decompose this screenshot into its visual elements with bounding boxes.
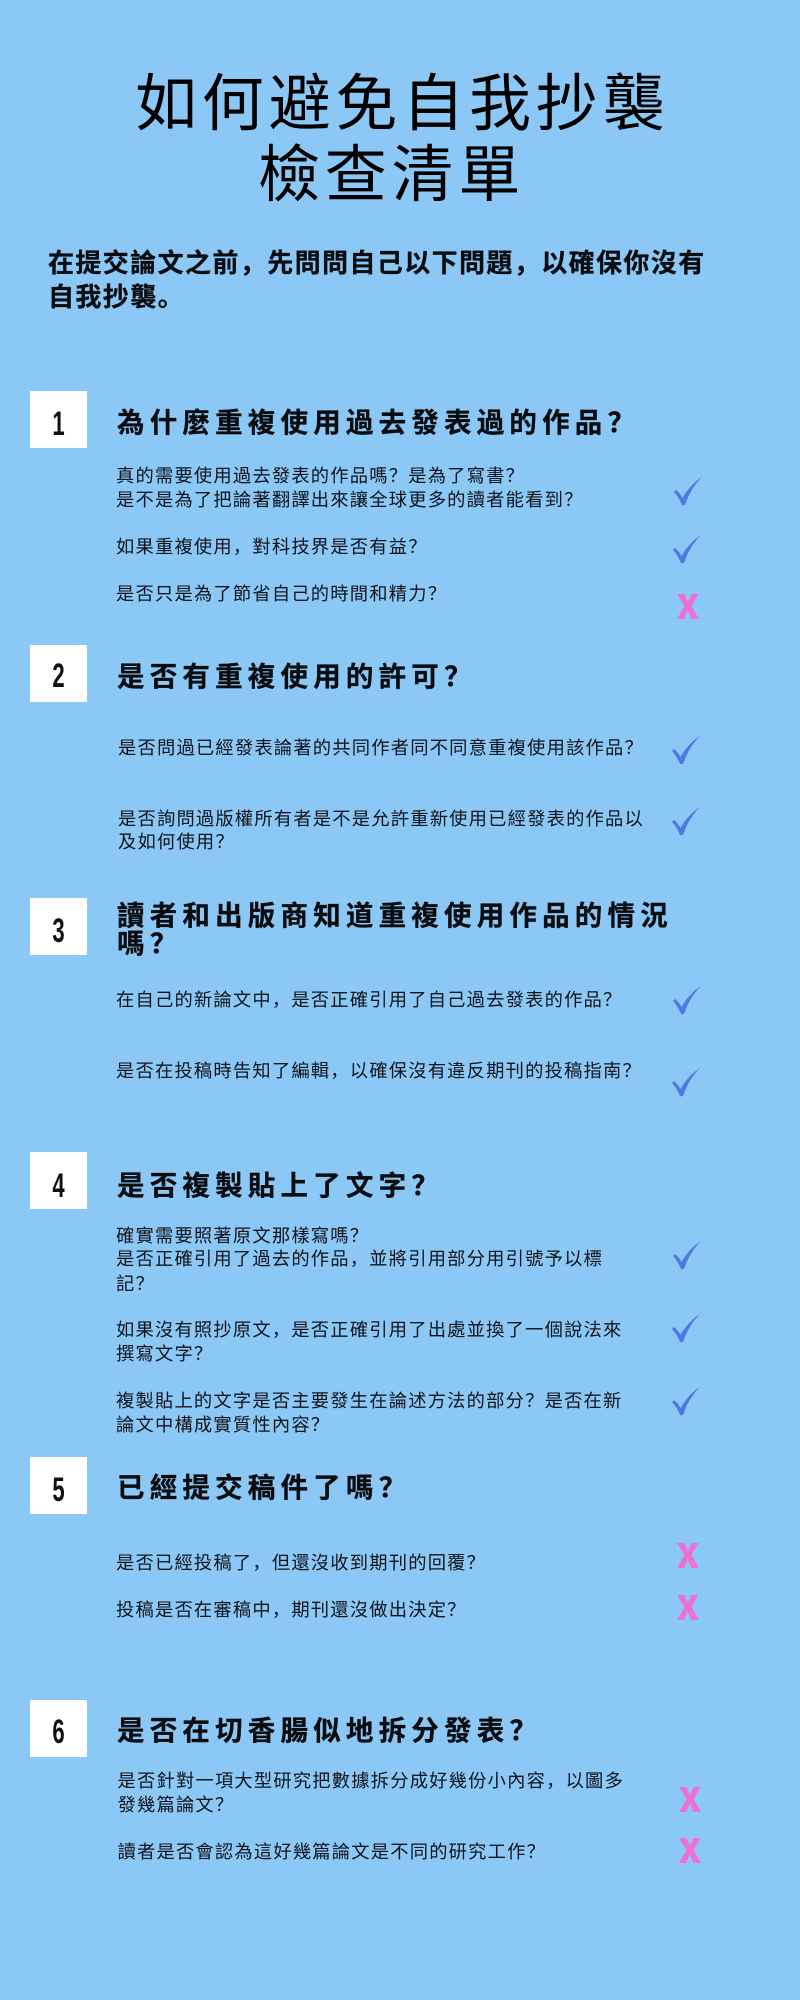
item text 6.2: 讀者是否會認為這好幾篇論文是不同的研究工作？ — [118, 1841, 546, 1862]
item text 4.2: 撰寫文字？ — [116, 1343, 213, 1364]
icon: cross — [679, 1787, 701, 1812]
title: 檢查清單 — [258, 141, 525, 210]
intro text: 在提交論文之前，先問問自己以下問題，以確保你沒有 — [48, 248, 706, 278]
icon: check — [672, 736, 700, 764]
intro text: 自我抄襲。 — [48, 282, 185, 312]
item text 4.3 — [116, 1390, 623, 1435]
title: 如何避免自我抄襲 — [135, 70, 669, 139]
item text 4.1: 是否正確引用了過去的作品，並將引用部分用引號予以標 — [116, 1248, 603, 1269]
panel: section 6 — [30, 1700, 701, 1863]
number badge 1 — [30, 391, 87, 448]
panel: section 5 — [30, 1457, 699, 1620]
icon: check — [673, 535, 701, 563]
number badge 2: 2 — [52, 657, 65, 695]
heading 5: 已經提交稿件了嗎？ — [117, 1472, 411, 1503]
item text 2.2: 及如何使用？ — [118, 831, 235, 852]
item text 4.3: 複製貼上的文字是否主要發生在論述方法的部分？是否在新 — [116, 1390, 623, 1411]
item text 1.1 — [116, 465, 584, 510]
heading 2: 是否有重複使用的許可？ — [117, 661, 477, 692]
item text 6.1: 是否針對一項大型研究把數據拆分成好幾份小內容，以圖多 — [118, 1770, 624, 1791]
icon: check — [672, 1387, 700, 1415]
number badge 3: 3 — [52, 912, 65, 950]
heading 3: 嗎？ — [117, 928, 182, 959]
title — [135, 70, 669, 210]
icon: cross — [679, 1838, 701, 1863]
panel: section 1 — [30, 391, 702, 619]
item text 1.3: 是否只是為了節省自己的時間和精力？ — [116, 583, 447, 604]
panel: section 3 — [30, 898, 701, 1096]
item text 4.1: 確實需要照著原文那樣寫嗎？ — [116, 1225, 369, 1246]
icon: check — [672, 807, 700, 835]
item text 4.1: 記？ — [116, 1273, 155, 1294]
heading 4: 是否複製貼上了文字？ — [117, 1170, 444, 1201]
number badge 5: 5 — [52, 1471, 65, 1509]
item text 2.2 — [118, 808, 644, 852]
number badge 4: 4 — [52, 1167, 65, 1205]
icon: cross — [677, 594, 699, 619]
heading 6: 是否在切香腸似地拆分發表？ — [117, 1715, 542, 1746]
item text 3.2: 是否在投稿時告知了編輯，以確保沒有違反期刊的投稿指南？ — [116, 1060, 642, 1081]
item text 3.1: 在自己的新論文中，是否正確引用了自己過去發表的作品？ — [116, 989, 623, 1010]
number badge 6 — [30, 1700, 87, 1757]
icon: cross — [677, 1543, 699, 1568]
number badge 1: 1 — [52, 405, 65, 443]
heading 1: 為什麼重複使用過去發表過的作品？ — [117, 407, 640, 438]
item text 1.2: 如果重複使用，對科技界是否有益？ — [116, 536, 428, 557]
panel: section 2 — [30, 645, 700, 852]
item text 5.1: 是否已經投稿了，但還沒收到期刊的回覆？ — [116, 1552, 486, 1573]
item text 2.1: 是否問過已經發表論著的共同作者同不同意重複使用該作品？ — [118, 737, 644, 758]
icon: check — [674, 477, 702, 505]
icon: check — [673, 986, 701, 1014]
icon: check — [672, 1314, 700, 1342]
number badge 4 — [30, 1152, 87, 1209]
item text 1.1: 真的需要使用過去發表的作品嗎？是為了寫書？ — [116, 465, 525, 486]
number badge 6: 6 — [52, 1713, 65, 1751]
item text 4.2 — [116, 1319, 623, 1364]
item text 6.1: 發幾篇論文？ — [118, 1794, 234, 1815]
heading 3: 讀者和出版商知道重複使用作品的情況 — [117, 900, 673, 931]
icon: check — [672, 1068, 700, 1096]
icon: check — [673, 1241, 701, 1269]
heading 3 — [117, 900, 673, 959]
number badge 5 — [30, 1457, 87, 1514]
intro text — [48, 248, 706, 312]
item text 4.1 — [116, 1225, 603, 1294]
number badge 2 — [30, 645, 87, 702]
number badge 3 — [30, 898, 87, 955]
panel: section 4 — [30, 1152, 701, 1435]
item text 4.3: 論文中構成實質性內容？ — [116, 1414, 330, 1435]
item text 1.1: 是不是為了把論著翻譯出來讓全球更多的讀者能看到？ — [116, 489, 584, 510]
icon: cross — [677, 1595, 699, 1620]
item text 5.2: 投稿是否在審稿中，期刊還沒做出決定？ — [116, 1599, 467, 1620]
item text 4.2: 如果沒有照抄原文，是否正確引用了出處並換了一個說法來 — [116, 1319, 623, 1340]
item text 2.2: 是否詢問過版權所有者是不是允許重新使用已經發表的作品以 — [118, 808, 644, 829]
item text 6.1 — [118, 1770, 624, 1815]
